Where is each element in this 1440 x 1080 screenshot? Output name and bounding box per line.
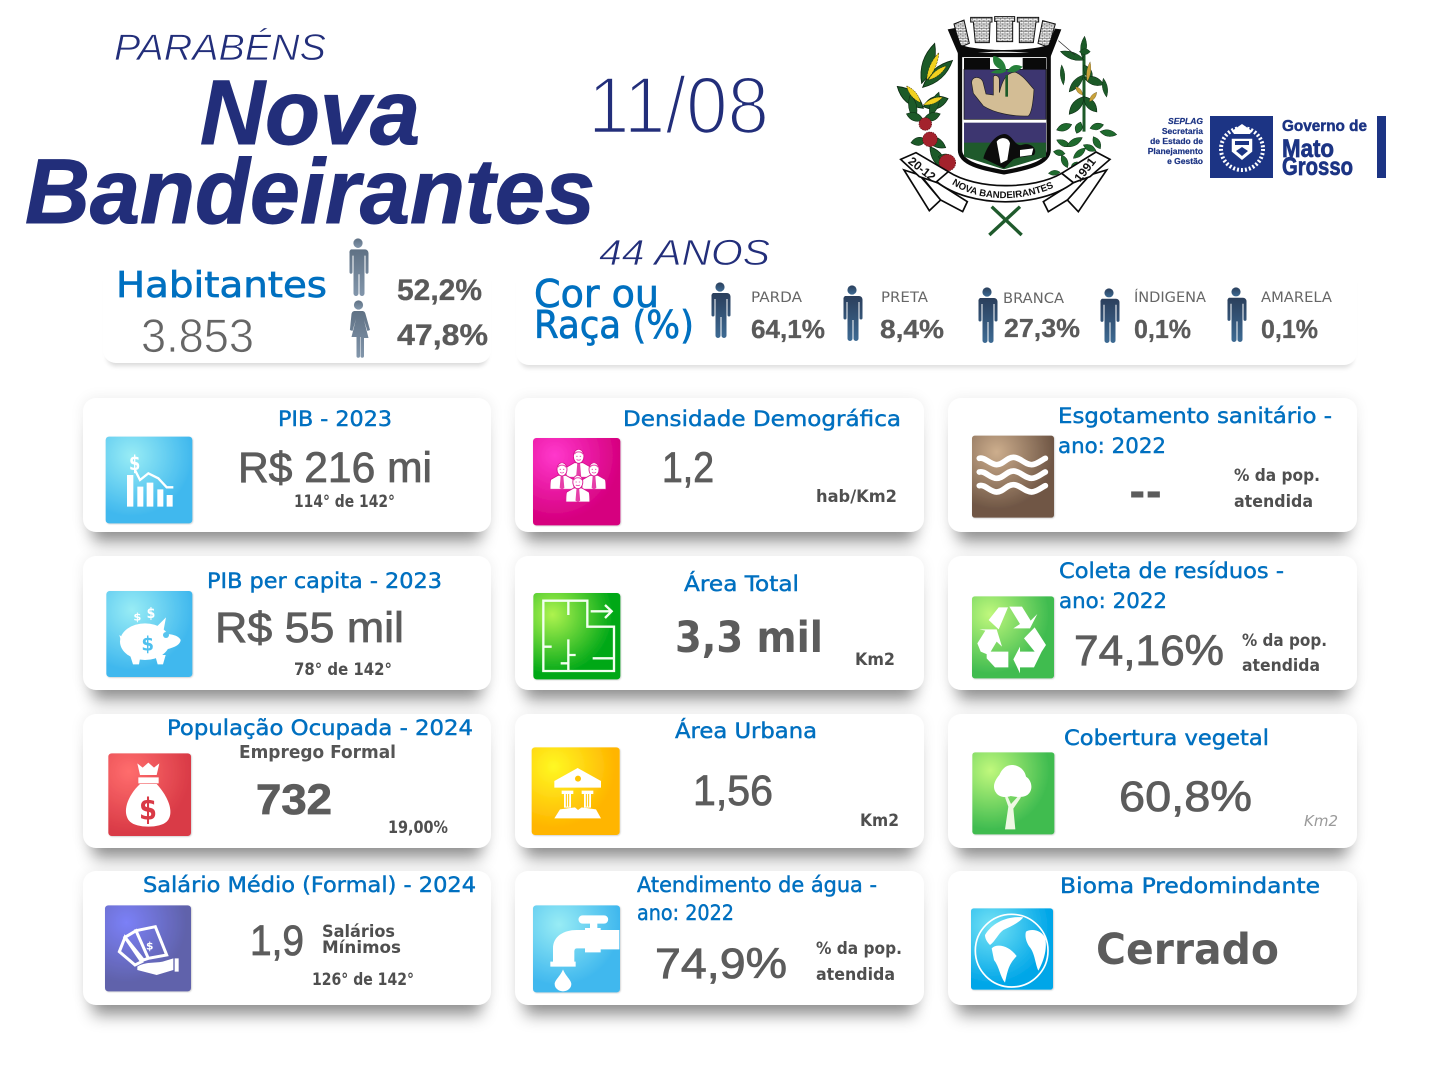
SEPLAG caption: e Gestão <box>1167 156 1203 166</box>
icon: people <box>533 438 620 525</box>
heading: Coleta de resíduos - <box>1059 559 1284 583</box>
male percentage: 52,2% <box>397 274 482 307</box>
hand holding sprout <box>972 72 1034 116</box>
population number: 3.853 <box>141 309 254 362</box>
value: R$ 55 mil <box>215 604 404 652</box>
panel: salário médio <box>83 871 491 1005</box>
icon: hand with bills <box>105 905 191 991</box>
heading: ano: 2022 <box>637 901 734 925</box>
rank: 78° de 142° <box>294 660 392 680</box>
icon: money bag <box>108 753 191 836</box>
blue bar <box>1377 116 1386 178</box>
heading: Atendimento de água - <box>637 873 877 897</box>
heading: ano: 2022 <box>1059 589 1167 613</box>
icon: waves <box>972 436 1054 518</box>
unit: % da pop. <box>1234 466 1320 486</box>
panel: cobertura vegetal <box>948 714 1357 848</box>
value: -- <box>1129 468 1162 518</box>
rank: 126° de 142° <box>312 970 414 990</box>
icon: piggy bank: $ <box>147 606 155 622</box>
right corn and coffee plant <box>1048 36 1117 176</box>
icon: piggy bank <box>106 591 192 677</box>
government wordmark: Governo de <box>1282 118 1367 135</box>
stat: preta <box>843 285 944 344</box>
unit: hab/Km2 <box>816 487 897 507</box>
value: 1,9 <box>250 917 304 965</box>
unit: atendida <box>816 965 895 985</box>
animal <box>983 134 1035 168</box>
heading <box>637 873 877 925</box>
heading: Salário Médio (Formal) - 2024 <box>143 873 476 897</box>
stat: preta: PRETA <box>881 290 928 306</box>
icon: civic building <box>532 747 620 835</box>
stat: amarela <box>1227 287 1332 344</box>
heading: parabéns: PARABÉNS <box>114 27 326 68</box>
icon: piggy bank: $ <box>141 633 154 656</box>
value: 60,8% <box>1119 773 1252 821</box>
icon: man <box>349 238 368 296</box>
panel: atendimento de água <box>515 871 924 1005</box>
share: 19,00% <box>388 818 448 838</box>
icon: recycle <box>972 596 1054 678</box>
date: 11/08 <box>588 61 769 151</box>
icon: tree <box>972 752 1054 834</box>
unit <box>816 939 902 985</box>
ribbon <box>901 152 1110 212</box>
coat of arms <box>896 16 1118 236</box>
coat of arms: 20-12 <box>905 154 939 184</box>
heading: Área Urbana <box>675 718 817 743</box>
icon: faucet <box>533 905 620 992</box>
panel: densidade demográfica <box>515 398 924 532</box>
stat: branca: 27,3% <box>1004 313 1080 343</box>
value: Cerrado <box>1096 925 1279 975</box>
panel: PIB <box>83 398 491 532</box>
stat: parda <box>711 282 825 344</box>
unit <box>1242 631 1327 676</box>
unit: atendida <box>1234 492 1313 512</box>
icon: piggy bank: $ <box>133 611 141 624</box>
value: 74,16% <box>1074 627 1224 675</box>
SEPLAG caption <box>1148 116 1203 166</box>
unit <box>1234 466 1320 512</box>
heading <box>1058 404 1332 458</box>
left corn and coffee plant <box>893 42 956 172</box>
blue emblem square <box>1210 116 1273 178</box>
title: Nova: Nova <box>200 62 420 164</box>
SEPLAG caption: Secretaria <box>1162 126 1203 136</box>
panel: esgotamento sanitário <box>948 398 1357 532</box>
value: 1,2 <box>662 444 714 492</box>
stat: parda: 64,1% <box>751 314 825 344</box>
stat: branca <box>978 287 1080 343</box>
unit <box>322 922 401 958</box>
heading: PIB - 2023 <box>278 407 392 431</box>
heading <box>1059 559 1284 613</box>
heading: Esgotamento sanitário - <box>1058 404 1332 428</box>
header: greeting and municipality name <box>25 27 770 273</box>
heading: Área Total <box>684 571 799 596</box>
value: 3,3 mil <box>675 613 823 663</box>
coat of arms: 1991 <box>1071 155 1099 185</box>
heading: habitantes: Habitantes <box>116 265 327 306</box>
icon: woman <box>350 300 370 358</box>
heading: Cobertura vegetal <box>1064 726 1269 750</box>
unit: Km2 <box>855 650 895 670</box>
Governo de Mato Grosso logo: Grosso <box>1282 153 1353 181</box>
heading: ano: 2022 <box>1058 434 1166 458</box>
stat: branca: BRANCA <box>1003 291 1064 307</box>
heading: Bioma Predomindante <box>1060 874 1320 898</box>
SEPLAG caption: SEPLAG <box>1168 116 1203 126</box>
heading: cor ou raça <box>534 272 694 347</box>
heading: PIB per capita - 2023 <box>207 569 442 593</box>
panel: área urbana <box>515 714 924 848</box>
Governo de Mato Grosso logo <box>1148 116 1386 181</box>
icon: falling chart <box>106 437 192 523</box>
stat: preta: 8,4% <box>880 314 944 344</box>
subheading: Emprego Formal <box>239 742 396 763</box>
stat: amarela: 0,1% <box>1261 314 1318 344</box>
unit: Km2 <box>860 811 899 831</box>
rank: 114° de 142° <box>294 492 395 512</box>
unit: % da pop. <box>816 939 902 959</box>
title: Bandeirantes: Bandeirantes <box>25 141 595 243</box>
unit: atendida <box>1242 656 1320 676</box>
panel: população ocupada <box>83 714 491 848</box>
heading: População Ocupada - 2024 <box>167 716 473 740</box>
heading: Densidade Demográfica <box>623 407 901 431</box>
stat: indígena <box>1100 288 1206 344</box>
heading: cor ou raça: Cor ou <box>534 272 659 316</box>
value: 732 <box>256 776 332 824</box>
panel: bioma predominante <box>948 871 1357 1005</box>
female percentage: 47,8% <box>397 319 488 352</box>
SEPLAG caption: de Estado de <box>1150 136 1203 146</box>
shield <box>960 55 1049 172</box>
unit: Km2 <box>1304 812 1338 830</box>
panel: área total <box>515 556 924 690</box>
stat: indígena: ÍNDIGENA <box>1134 289 1206 306</box>
icon: falling chart: $ <box>129 451 140 475</box>
value: 74,9% <box>655 940 787 988</box>
icon: money bag: $ <box>139 792 157 827</box>
value: 1,56 <box>693 767 773 815</box>
icon: globe <box>971 908 1053 990</box>
SEPLAG caption: Planejamento <box>1148 146 1203 156</box>
panel: cor ou raça <box>516 262 1357 365</box>
Governo de Mato Grosso logo: Mato <box>1282 135 1334 163</box>
stat: amarela: AMARELA <box>1261 290 1332 306</box>
panel: habitantes <box>103 262 491 363</box>
stat: indígena: 0,1% <box>1134 314 1191 344</box>
unit: % da pop. <box>1242 631 1327 651</box>
unit: Mínimos <box>322 938 401 958</box>
stat: parda: PARDA <box>751 290 802 306</box>
coat of arms: NOVA BANDEIRANTES <box>952 178 1053 198</box>
value: R$ 216 mi <box>238 444 432 492</box>
panel: coleta de resíduos <box>948 556 1357 690</box>
heading: cor ou raça: Raça (%) <box>534 303 694 347</box>
unit: Salários <box>322 922 395 942</box>
anniversary age: 44 ANOS <box>599 232 770 273</box>
icon: hand with bills: $ <box>146 939 153 952</box>
crown towers <box>954 17 1055 47</box>
icon: floor plan <box>533 593 620 679</box>
panel: PIB per capita <box>83 556 491 690</box>
